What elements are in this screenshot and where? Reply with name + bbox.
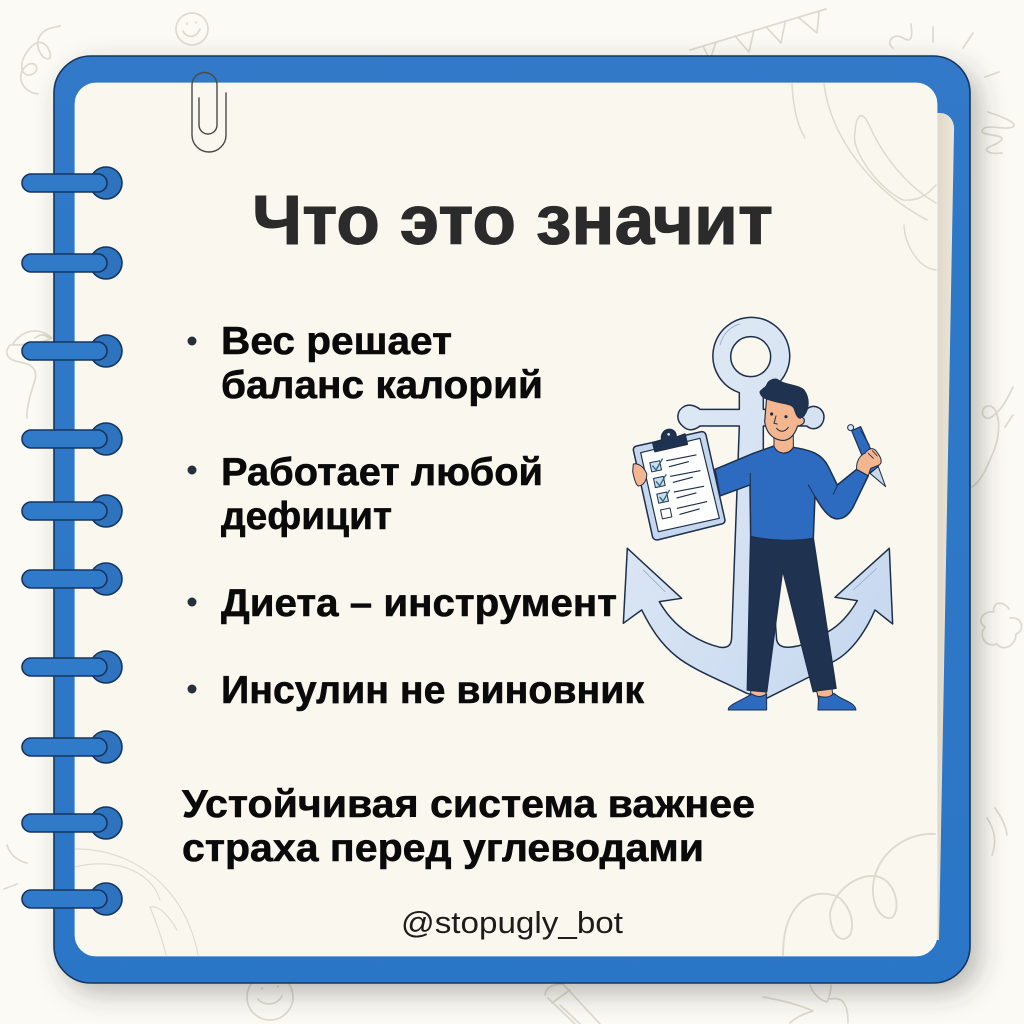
title: Что это значит <box>252 181 773 259</box>
page doodles <box>75 84 936 955</box>
illustration: man with anchor <box>623 317 893 710</box>
bullet 1 <box>188 320 543 407</box>
bullet 1: баланс калорий <box>221 364 543 407</box>
conclusion text <box>182 783 755 870</box>
bullet 1: Вес решает <box>221 320 452 363</box>
bullet 4: Инсулин не виновник <box>221 669 644 712</box>
back sheet <box>925 113 954 940</box>
man: ankles and shoes <box>728 689 856 710</box>
conclusion text: страха перед углеводами <box>182 827 704 870</box>
icon: clipboard <box>633 429 725 540</box>
bullet list <box>188 320 644 712</box>
man: legs <box>747 537 836 692</box>
conclusion text: Устойчивая система важнее <box>182 783 755 826</box>
spiral binding rings <box>22 167 122 915</box>
notebook page <box>75 83 937 956</box>
handle: @stopugly_bot <box>401 905 623 940</box>
bullet 2 <box>188 451 543 538</box>
man: head <box>760 379 808 453</box>
bullet 3: Диета – инструмент <box>221 582 617 625</box>
icon: left hand <box>633 464 647 486</box>
icon: pen and hand <box>848 425 886 487</box>
bullet 2: дефицит <box>221 495 392 538</box>
icon: anchor <box>623 317 893 698</box>
man: sweater <box>715 446 868 540</box>
paperclip <box>192 73 226 152</box>
bullet 2: Работает любой <box>221 451 543 494</box>
